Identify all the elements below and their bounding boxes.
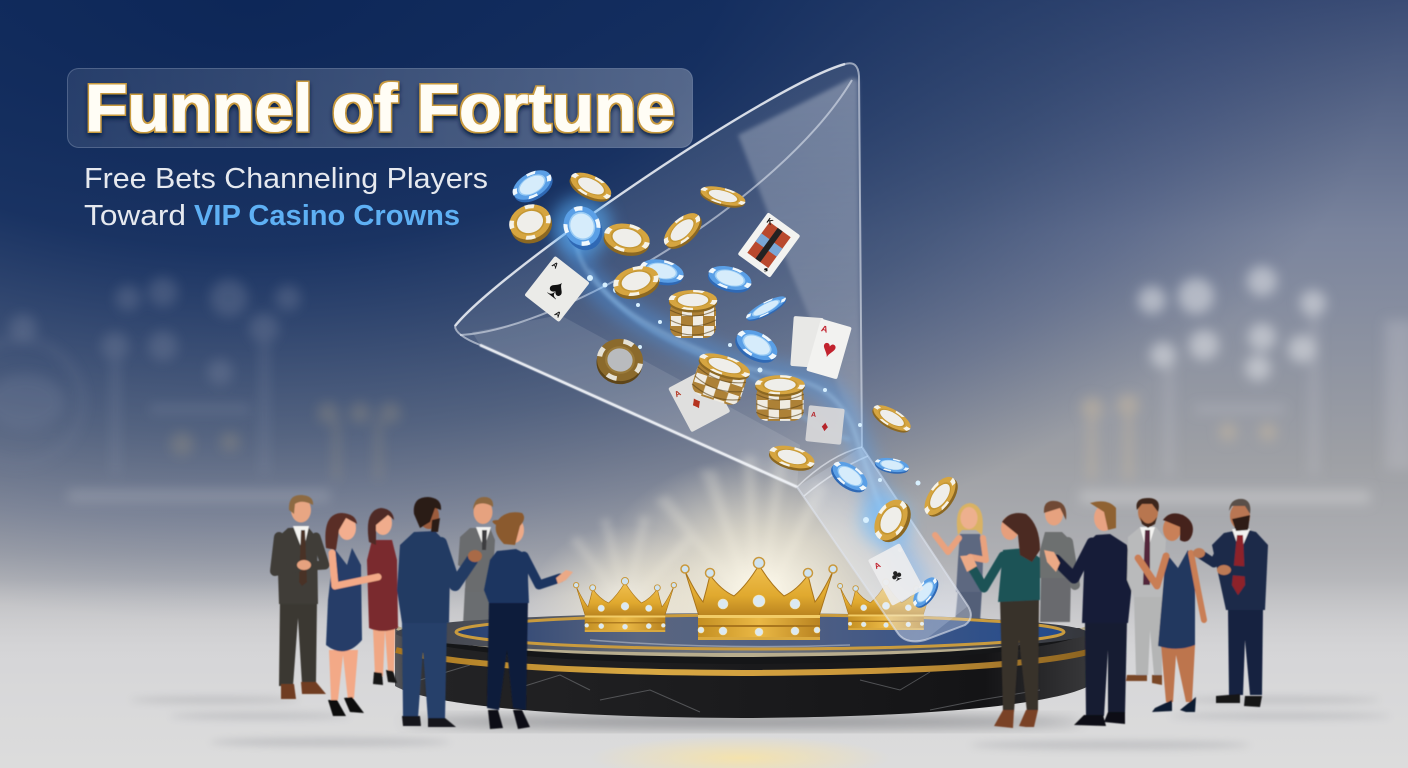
card: ace of hearts: A (811, 411, 816, 419)
crowns (574, 558, 934, 640)
funnel rim (460, 80, 852, 335)
card: king of spades (738, 212, 800, 278)
card: king of spades: K (765, 216, 775, 227)
subtitle (84, 163, 488, 232)
card: ace of diamonds: ♦ (687, 392, 705, 414)
card pair: aces: ♥ (818, 335, 839, 364)
chip on card pile (688, 348, 753, 408)
card: ace of spades (524, 256, 590, 322)
stage top edge (396, 634, 1088, 664)
marble base (395, 628, 1089, 718)
card: ace of spades: ♠ (542, 272, 573, 305)
blurred casino backdrop right (1080, 266, 1408, 503)
podium stage (395, 613, 1089, 718)
blue energy swirl (552, 196, 920, 590)
card: king of spades: ♠ (762, 265, 771, 275)
person: man in gray suit, left (458, 497, 495, 625)
floor (0, 580, 1408, 768)
card pair: aces: A (820, 323, 830, 335)
card: ace of diamonds (668, 368, 730, 432)
person: man in gray sweater (1038, 501, 1075, 622)
person: man in light gray suit (1126, 498, 1166, 685)
subtitle: Toward (84, 200, 186, 232)
falling chips (504, 164, 964, 612)
card: ace of hearts (805, 405, 845, 445)
people front (275, 495, 1268, 729)
chip stacks (669, 290, 805, 421)
subtitle: VIP Casino Crowns (194, 200, 460, 232)
person: woman in blue dress (325, 513, 378, 716)
person: navy suit man, back right (1044, 501, 1133, 726)
blurred casino backdrop left (0, 277, 401, 502)
person: woman in navy, back (484, 512, 573, 729)
subtitle: Free Bets Channeling Players (84, 163, 488, 195)
crown: right (838, 579, 934, 630)
card: inside funnel neck: A (873, 560, 882, 571)
person: man in navy suit with red tie (1193, 499, 1268, 707)
card: inside funnel neck: ♣ (888, 566, 906, 586)
crown: left (574, 578, 676, 632)
card: ace of diamonds: A (673, 388, 683, 399)
glass funnel (455, 63, 971, 641)
card: ace of spades: A (553, 309, 563, 320)
card: ace of spades: A (550, 260, 560, 271)
gold band (396, 650, 1088, 673)
people behind stage (458, 497, 1075, 625)
blue inner ring (456, 615, 1064, 649)
crown: centre (681, 558, 837, 640)
playing cards (524, 212, 924, 606)
title panel (68, 68, 692, 148)
card: inside funnel neck (868, 543, 924, 606)
stage top surface (396, 613, 1088, 653)
person: blonde woman (935, 503, 986, 622)
card pair: aces (790, 316, 852, 379)
light rays behind crowns (530, 455, 930, 725)
title: Funnel of Fortune (85, 71, 675, 146)
person: woman in green top, back (960, 513, 1040, 728)
card: ace of hearts: ♦ (821, 418, 829, 434)
person: man in dark suit (275, 495, 326, 699)
person: navy suit man, back (397, 497, 482, 727)
person: woman in red dress (367, 508, 398, 685)
person: woman in navy dress, right (1138, 513, 1204, 712)
